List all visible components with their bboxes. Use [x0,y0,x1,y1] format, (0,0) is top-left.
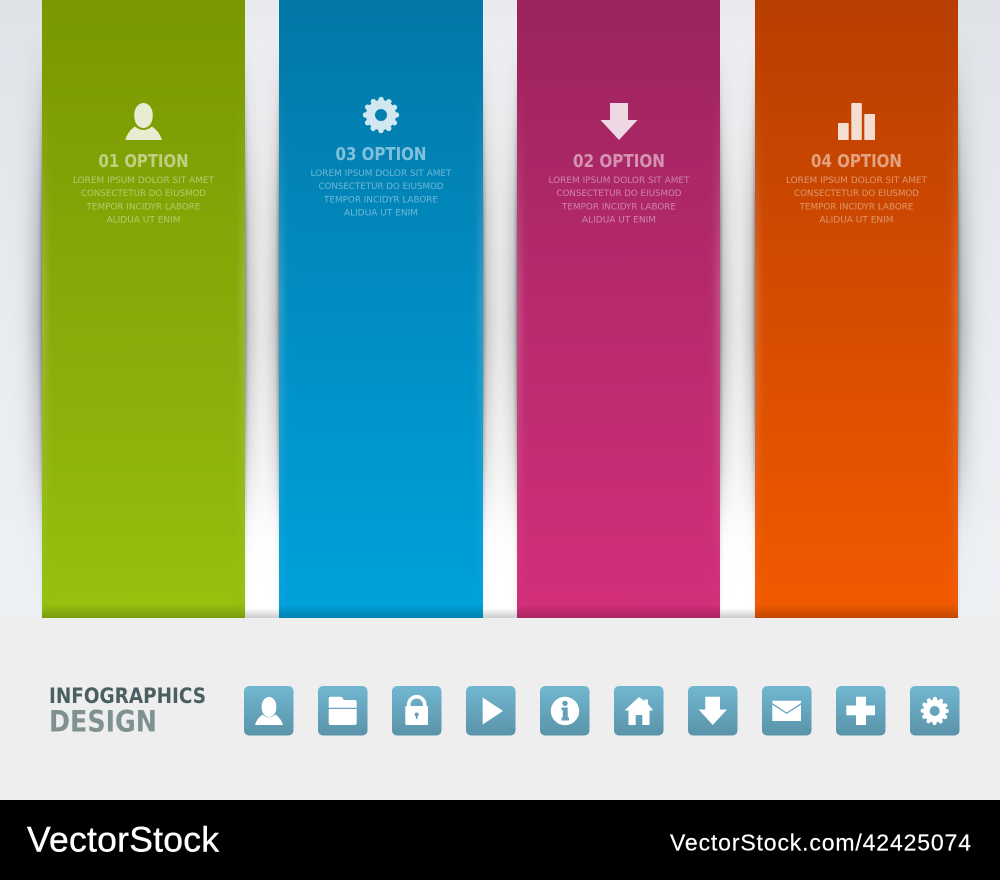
icon: mail button [762,686,812,736]
panel: 03 option [279,0,483,640]
panel: 04 option [755,0,958,640]
text block: 02 description: ALIDUA UT ENIM [582,216,656,226]
heading: 03 option: 03 OPTION [336,144,426,165]
footer url: VectorStock.com/42425074 [670,830,971,856]
icon: user button [244,686,294,736]
footer bar [0,800,1000,880]
icon: lock button [392,686,442,736]
text block: 04 description: CONSECTETUR DO EIUSMOD [794,189,919,199]
icon: settings button [910,686,960,736]
icon: gear [366,100,396,130]
icon: download button [688,686,738,736]
text block: 01 description: ALIDUA UT ENIM [106,216,180,226]
icon: folder button [318,686,368,736]
text block: 03 description: LOREM IPSUM DOLOR SIT AMET [310,169,452,179]
title: infographics design [49,684,206,738]
text block: 01 description: LOREM IPSUM DOLOR SIT AMET [73,176,214,186]
heading: 04 option: 04 OPTION [811,151,902,172]
icon: down arrow [600,103,638,140]
panel: 01 option [42,0,245,640]
icon: bar chart [838,103,875,140]
text block: 04 description [786,176,927,226]
text block: 02 description [548,176,690,226]
text block: 01 description: CONSECTETUR DO EIUSMOD [81,189,206,199]
text block: 04 description: TEMPOR INCIDYR LABORE [799,202,914,212]
panel: 02 option [517,0,720,640]
text block: 02 description: CONSECTETUR DO EIUSMOD [556,189,682,199]
title: infographics design: INFOGRAPHICS [49,684,206,708]
heading: 02 option: 02 OPTION [573,151,665,172]
text block: 04 description: ALIDUA UT ENIM [820,216,894,226]
text block: 01 description [73,176,214,226]
strip shadows [40,40,960,618]
text block: 02 description: TEMPOR INCIDYR LABORE [561,202,676,212]
heading: 01 option: 01 OPTION [98,151,188,172]
text block: 03 description: CONSECTETUR DO EIUSMOD [318,182,444,192]
icon: info button [540,686,590,736]
icon: person [125,103,162,140]
icon: home button [614,686,664,736]
text block: 03 description: TEMPOR INCIDYR LABORE [323,195,438,205]
footer logo: VectorStock [27,820,219,860]
text block: 02 description: LOREM IPSUM DOLOR SIT AMET [548,176,690,186]
text block: 03 description: ALIDUA UT ENIM [344,209,418,219]
icon: play button [466,686,516,736]
upper backdrop [0,0,1000,618]
icon: plus button [836,686,886,736]
text block: 04 description: LOREM IPSUM DOLOR SIT AMET [786,176,927,186]
text block: 01 description: TEMPOR INCIDYR LABORE [86,202,201,212]
title: infographics design: DESIGN [49,704,157,738]
text block: 03 description [310,169,452,219]
